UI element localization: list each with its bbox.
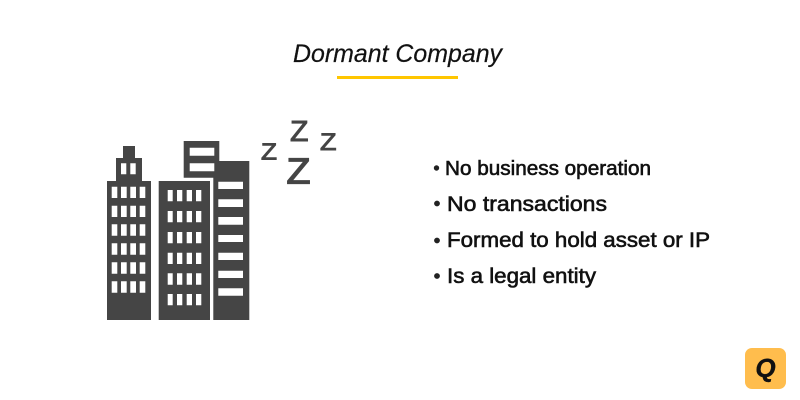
middle building: [159, 181, 210, 320]
bullet: formed to hold asset or IP: Formed to hold asset or IP: [447, 229, 710, 252]
icon: sleeping Z letters: [261, 116, 337, 192]
left tower: [107, 146, 151, 320]
logo: Q badge: [745, 348, 786, 389]
icon: office buildings: [107, 141, 249, 320]
bullet: is a legal entity: Is a legal entity: [447, 265, 597, 288]
logo: Q badge: Q: [755, 353, 776, 383]
icon: sleeping Z letters: Z: [286, 150, 310, 192]
title underline: [337, 76, 458, 79]
bullet: no business operation: No business operation: [445, 158, 651, 180]
icon: sleeping Z letters: Z: [290, 116, 308, 148]
bullet: no transactions: No transactions: [447, 193, 607, 216]
icon: sleeping Z letters: Z: [261, 138, 277, 164]
title: Dormant Company: [293, 40, 503, 68]
bullet list: [434, 158, 710, 288]
icon: sleeping Z letters: Z: [320, 129, 337, 156]
right tower with rooftop block: [184, 141, 249, 320]
